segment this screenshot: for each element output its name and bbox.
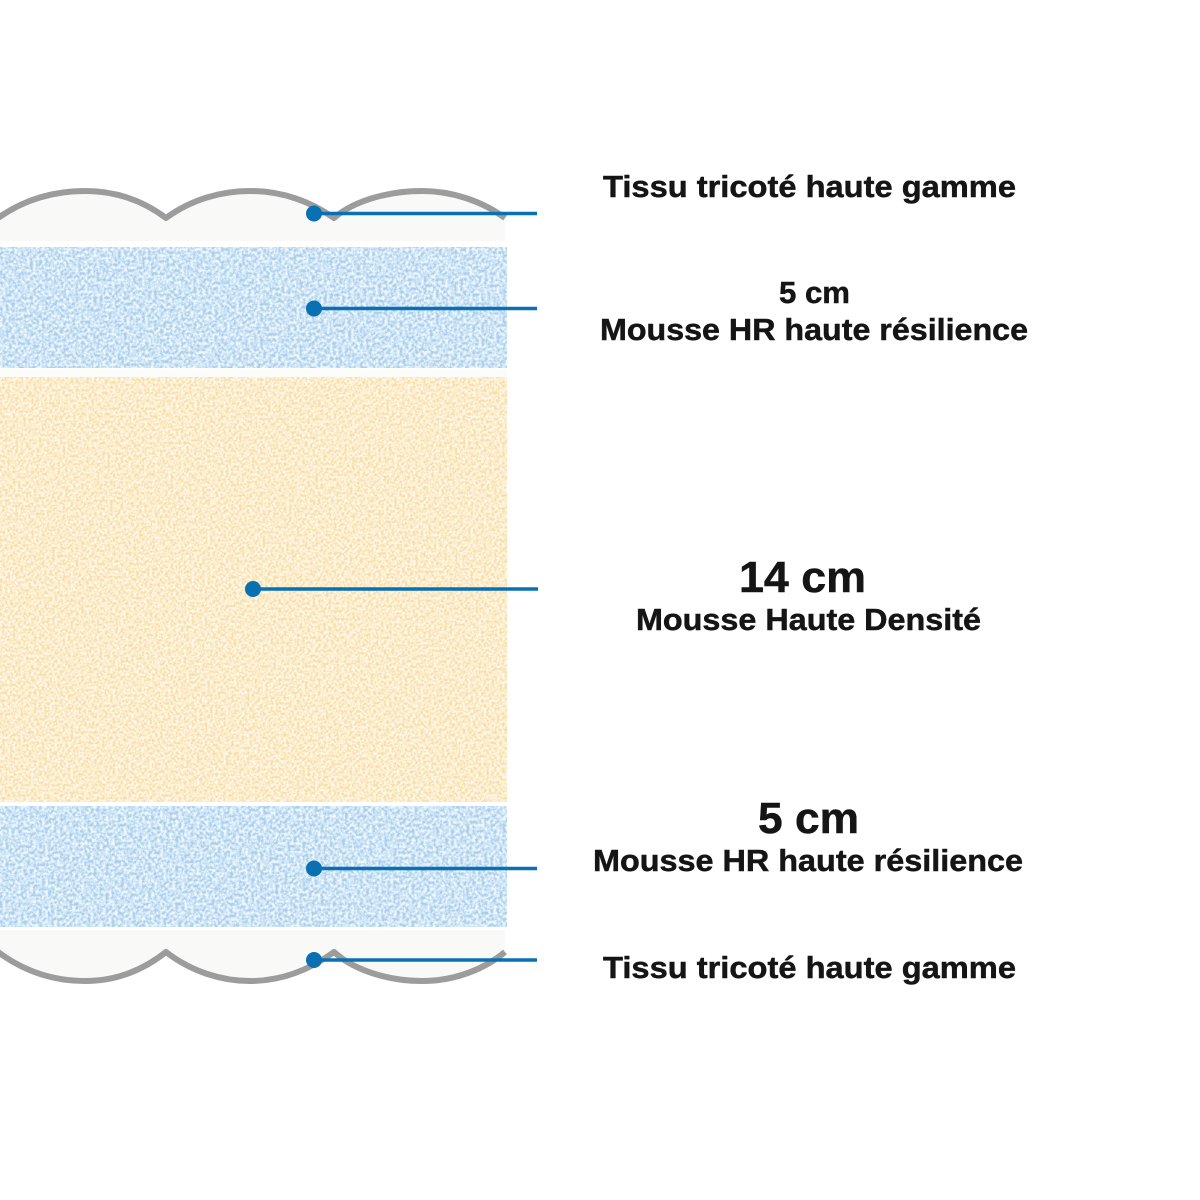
label: lower foam: 5 cm [758, 794, 859, 843]
lower blue HR foam layer [0, 806, 507, 927]
yellow high density foam core [0, 377, 507, 802]
callout: core foam [245, 581, 538, 597]
thin fabric strip above core [0, 369, 507, 377]
callout: lower foam [306, 860, 537, 876]
label: top fabric: Tissu tricoté haute gamme [603, 169, 1016, 204]
label: core foam: Mousse Haute Densité [636, 602, 981, 637]
label: upper foam: 5 cm [779, 275, 850, 310]
label: bottom fabric: Tissu tricoté haute gamme [603, 950, 1016, 985]
label: lower foam [593, 794, 1023, 878]
bottom fabric layer [0, 930, 505, 982]
label: core foam [636, 553, 981, 637]
label: upper foam [600, 275, 1028, 347]
label: upper foam: Mousse HR haute résilience [600, 312, 1028, 347]
label: core foam: 14 cm [739, 553, 866, 602]
label: lower foam: Mousse HR haute résilience [593, 843, 1023, 878]
upper blue HR foam layer [0, 247, 507, 368]
callout: upper foam [306, 300, 537, 316]
callout: top fabric [306, 206, 537, 222]
callout: bottom fabric [306, 952, 537, 968]
top fabric layer [0, 188, 505, 241]
